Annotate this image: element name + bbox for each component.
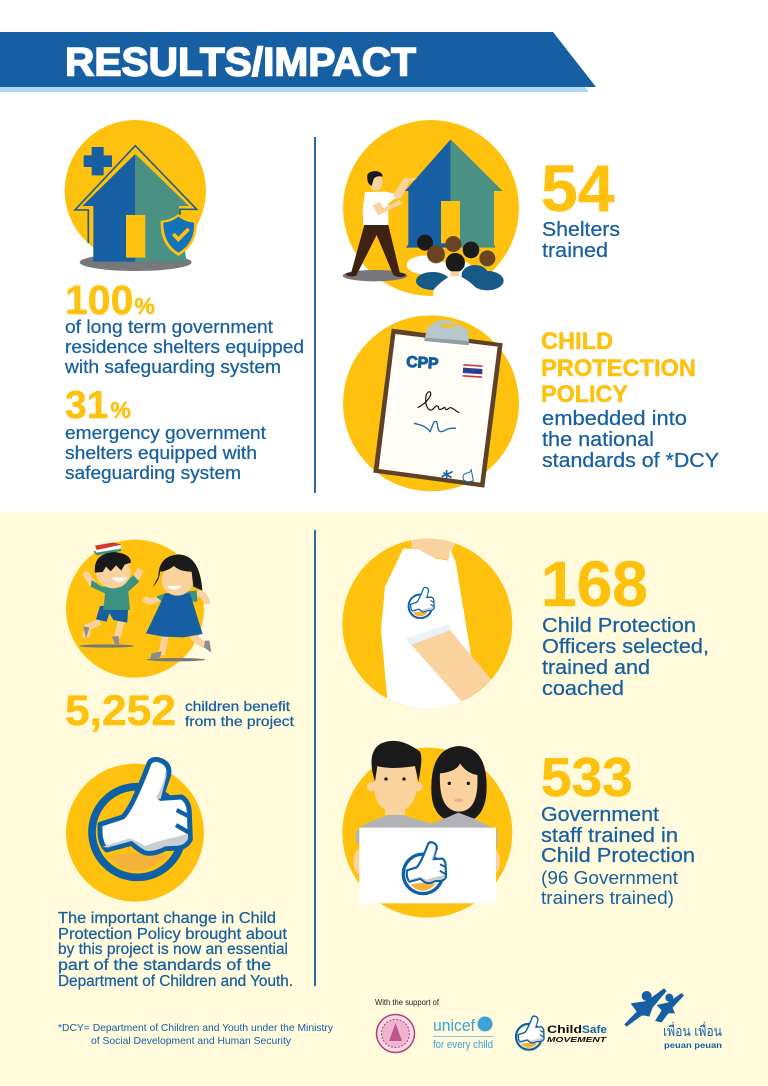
audience: [407, 235, 504, 310]
text block: important change: Protection Policy brought about: [58, 926, 288, 943]
stat: 31%: emergency government: [65, 423, 266, 443]
sign: [359, 828, 496, 903]
stat: 100%: residence shelters equipped: [65, 337, 304, 357]
stat: child protection policy: standards of *DCY: [542, 450, 719, 472]
text block: important change: part of the standards of the: [58, 957, 271, 974]
stat: 31%: shelters equipped with: [65, 443, 257, 463]
stat: 168 officers: Child Protection: [542, 615, 696, 637]
stat: 5,252 children: 5,252: [65, 687, 176, 735]
stat: 5,252 children: from the project: [185, 713, 294, 729]
title: RESULTS/IMPACT: [65, 40, 416, 84]
Thai flag: [463, 364, 483, 378]
stat: 533 staff: trainers trained): [541, 888, 674, 908]
stat: 533 staff: staff trained in: [541, 825, 678, 847]
stat: 54 shelters trained: 54: [541, 151, 615, 225]
logo: unicef: unicef: [433, 1016, 475, 1035]
header banner: [0, 32, 596, 92]
icon: staff holding sign: [342, 741, 512, 918]
stat: 533 staff: Child Protection: [541, 845, 695, 867]
footnote: *DCY= Department of Children and Youth under the Ministry: [58, 1022, 334, 1034]
books: [93, 547, 121, 555]
stat: 54 shelters trained: Shelters: [542, 219, 620, 241]
man: [356, 813, 440, 853]
logo: ministry seal: [376, 1014, 414, 1052]
icon: safeguarded house: [65, 120, 206, 271]
logo: peuan peuan: [624, 988, 722, 1050]
girl: [162, 636, 205, 655]
CPP label: CPP: [406, 354, 439, 373]
icon: children playing: [66, 540, 211, 678]
stat: 168 officers: coached: [542, 678, 624, 700]
stat: 168 officers: 168: [541, 548, 648, 620]
icon: thumbs up: [66, 759, 204, 902]
footnote: [58, 1022, 334, 1047]
stat: 100%: [64, 277, 304, 377]
stat: 100%: 100%: [65, 277, 155, 323]
footnote: of Social Development and Human Security: [91, 1035, 292, 1047]
text block: important change: by this project is now an essential: [58, 941, 288, 958]
stat: 31%: 31%: [65, 384, 131, 427]
logo: ChildSafe Movement: [516, 1016, 608, 1050]
stat: 533 staff: [541, 746, 695, 908]
logo: peuan peuan: peuan peuan: [664, 1040, 722, 1050]
logo: unicef: for every child: [433, 1039, 493, 1051]
stat: child protection policy: the national: [542, 429, 654, 451]
stat: child protection policy: POLICY: [541, 381, 628, 408]
stat: 533 staff: Government: [541, 804, 659, 826]
stat: 168 officers: trained and: [542, 657, 650, 679]
stat: 168 officers: [541, 548, 709, 700]
stat: child protection policy: embedded into: [542, 408, 687, 430]
logo: unicef: [433, 1016, 493, 1051]
stat: 100%: of long term government: [65, 317, 273, 337]
stat: 31%: safeguarding system: [65, 463, 241, 483]
stat: 54 shelters trained: [541, 151, 620, 262]
stat: 5,252 children: [65, 687, 294, 735]
stat: 168 officers: Officers selected,: [542, 636, 709, 658]
stat: 100%: with safeguarding system: [64, 357, 281, 377]
icon: arm with badge: [342, 537, 512, 710]
icon: trainer and shelter: [343, 120, 519, 310]
woman: [431, 746, 487, 818]
icon: clipboard with CPP: [343, 315, 519, 491]
cream lower panel background: [0, 512, 768, 1086]
stat: child protection policy: PROTECTION: [541, 355, 696, 382]
support label: With the support of: [375, 997, 440, 1007]
stat: 54 shelters trained: trained: [542, 240, 608, 262]
text block: important change: [58, 910, 293, 990]
stat: 533 staff: 533: [541, 746, 633, 808]
text block: important change: The important change in Child: [58, 910, 276, 927]
logo: ChildSafe Movement: Child: [547, 1024, 582, 1036]
logo: ChildSafe Movement: Safe: [582, 1024, 607, 1036]
stat: child protection policy: [541, 328, 719, 472]
logo: peuan peuan: เพื่อน เพื่อน: [663, 1022, 722, 1039]
text block: important change: Department of Children and Youth.: [58, 973, 293, 990]
stat: child protection policy: CHILD: [541, 328, 613, 355]
stat: 31%: [65, 384, 266, 483]
stat: 533 staff: (96 Government: [541, 868, 678, 888]
logo: ChildSafe Movement: MOVEMENT: [547, 1035, 608, 1044]
stat: 5,252 children: children benefit: [185, 698, 290, 714]
hands: [353, 849, 367, 874]
